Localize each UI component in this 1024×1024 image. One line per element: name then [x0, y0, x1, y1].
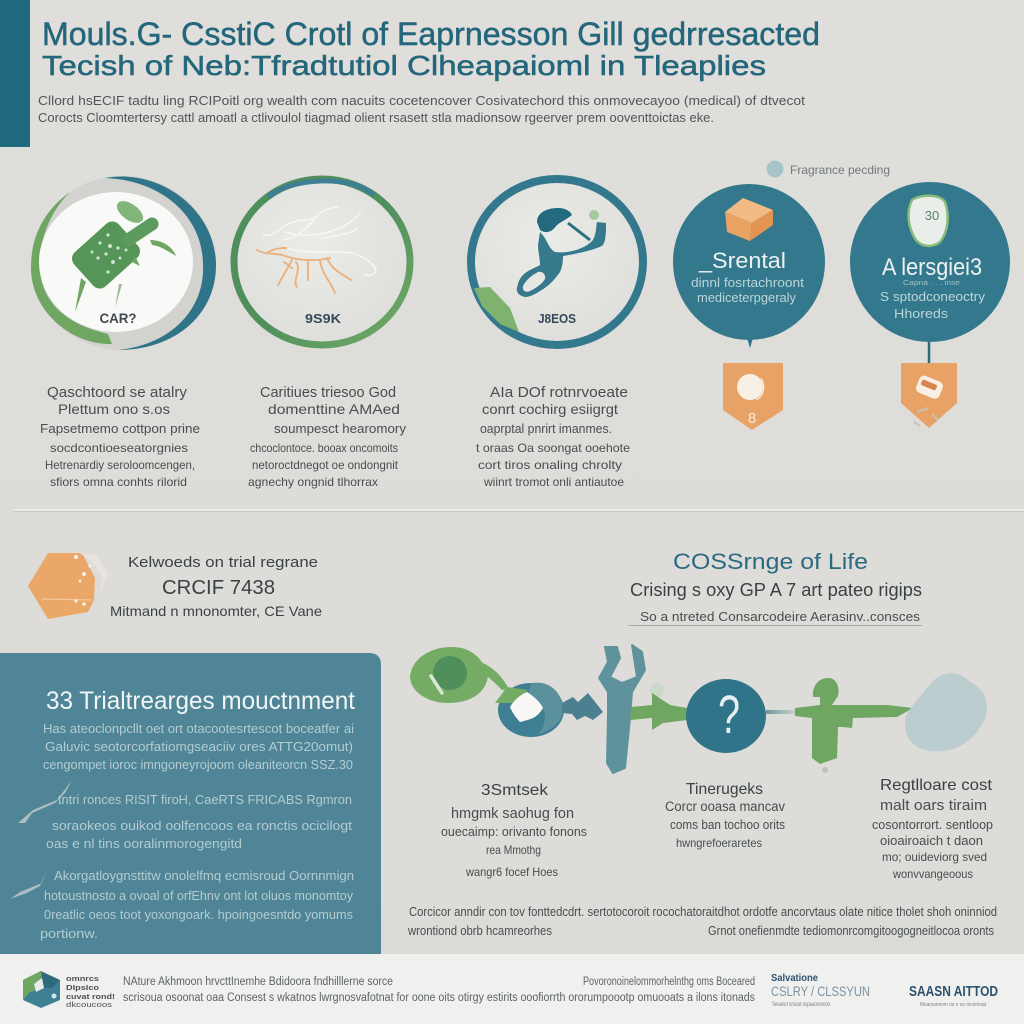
icon: teal circle with hand	[495, 683, 564, 737]
panel paragraph 2: soraokeos ouikod oolfencoos ea ronctis ocicilogt	[52, 818, 352, 833]
column text 2: Tinerugeks	[686, 781, 763, 798]
footer partner logo 2: SAASN AITTOD	[909, 984, 998, 1000]
circle text: Capna . . . inse	[903, 280, 960, 287]
footer logo: dkcoucoos	[66, 1000, 112, 1009]
column text 3: cosontorrort. sentloop	[872, 817, 993, 832]
circle 4: Srental	[673, 184, 825, 348]
circle 5: Alergiei	[850, 182, 1010, 342]
orange tag 2	[901, 342, 957, 428]
process chain diagram	[410, 645, 987, 773]
icon: green blob	[410, 647, 509, 703]
panel paragraph 3: 0reatlic oeos toot yoxongoark. hpoingoesntdo yomums	[44, 907, 353, 922]
panel paragraph 3	[40, 868, 354, 941]
column text 1: hmgmk saohug fon	[451, 805, 574, 822]
text block 2: netoroctdnegot oe ondongnit	[252, 458, 399, 472]
panel paragraph 3: hotoustnosto a ovoal of orfEhnv ont lot oluos monomtoy	[44, 888, 353, 903]
text block 3: t oraas Oa soongat ooehote	[476, 441, 630, 455]
icon: roots	[257, 207, 376, 293]
panel paragraph 3: portionw.	[40, 926, 98, 941]
icon: pale blob	[905, 673, 987, 752]
title: Tecish of Neb:Tfradtutiol Clheapaioml in Tleaplies	[42, 50, 766, 81]
footer text: Povoronoinelommorhelnthg oms Boceared	[583, 976, 755, 988]
connector	[766, 710, 796, 714]
column text 3: mo; ouideviorg sved	[882, 850, 987, 864]
text block 1: socdcontioeseatorgnies	[50, 441, 188, 455]
column text 2: Corcr ooasa mancav	[665, 799, 785, 814]
text block 1	[40, 385, 200, 489]
circle 2: root	[234, 179, 410, 345]
title	[42, 16, 820, 81]
intro text	[38, 93, 805, 125]
column text 3	[872, 777, 993, 881]
panel paragraph 1: Galuvic seotorcorfatiomgseaciiv ores ATTG20omut)	[45, 739, 353, 754]
key stat text: CRCIF 7438	[162, 577, 275, 599]
icon: shield: 30	[925, 208, 939, 223]
legend	[766, 160, 890, 178]
key stat text: Mitmand n mnonomter, CE Vane	[110, 603, 322, 619]
text block 2: Caritiues triesoo God	[260, 385, 396, 401]
footnote: Grnot onefienmdte tediomonrcomgitoogogneitlocoa oronts	[708, 924, 994, 938]
text block 2	[248, 385, 406, 489]
circle text: _Srental	[698, 248, 786, 273]
column text 1: rea Mmothg	[486, 843, 541, 857]
orange tag 1: 8	[748, 410, 756, 427]
icon: brush 2	[10, 870, 47, 899]
text block 1: Hetrenardiy seroloomcengen,	[45, 458, 195, 472]
footer partner logo 2	[909, 984, 998, 1008]
footnote: wrontiond obrb hcamreorhes	[407, 924, 552, 938]
panel paragraph 2	[46, 792, 352, 851]
arrow: teal	[562, 693, 603, 720]
text block 2: agnechy ongnid tlhorrax	[248, 475, 378, 489]
panel paragraph 1	[43, 721, 354, 772]
footer partner logo 1: Sevanct orsoot oxpaaomocoo	[772, 1002, 830, 1008]
key stat text	[110, 555, 322, 619]
footer logo: omnrcs	[66, 974, 99, 983]
section heading: right: So a ntreted Consarcodeire Aerasinv..consces	[640, 609, 921, 624]
text block 3: AIa DOf rotnrvoeate	[490, 385, 628, 401]
intro text: Cllord hsECIF tadtu ling RCIPoitl org wealth com nacuits cocetencover Cosivatechord this onmovecayoo (medical) of dtvecot	[38, 93, 805, 108]
circle 3: figure	[471, 179, 643, 345]
footer logo: DIpsIco	[66, 983, 100, 992]
column text 3: oioairoaich t daon	[880, 833, 983, 848]
column text 1: 3Smtsek	[481, 782, 549, 799]
legend: Fragrance pecding	[790, 163, 890, 177]
circle text: mediceterpgeraly	[697, 290, 796, 305]
panel: treatment	[0, 653, 381, 954]
divider	[14, 509, 1024, 512]
text block 2: domenttine AMAed	[268, 401, 400, 417]
circle label: 9S9K	[305, 312, 341, 326]
circle 1: green beetle leaf	[31, 176, 216, 350]
footer partner logo 1	[771, 973, 870, 1008]
orange tag 1	[723, 363, 783, 430]
intro text: Corocts Cloomtertersy cattl amoatl a ctlivoulol tiagmad olient rsasett stla madionsow rgeerver prem ooventtoictas eke.	[38, 110, 714, 125]
footer partner logo 1: Salvatione	[771, 973, 818, 984]
text block 1: Qaschtoord se atalry	[47, 385, 188, 401]
text block 1: sfiors omna conhts rilorid	[50, 475, 187, 489]
circle text	[880, 254, 986, 321]
panel paragraph 2: tntri ronces RISIT firoH, CaeRTS FRICABS Rgmron	[58, 792, 352, 807]
footer band	[0, 954, 1024, 1024]
text block 3: conrt cochirg esiigrgt	[482, 401, 618, 417]
title: Mouls.G- CsstiC Crotl of Eaprnesson Gill gedrresacted	[42, 16, 820, 52]
icon: orange box	[725, 198, 773, 241]
arrow: green	[630, 683, 687, 730]
footer text: NAture Akhmoon hrvcttInemhe Bdidoora fndhilllerne sorce	[123, 976, 393, 988]
column text 1: wangr6 focef Hoes	[465, 865, 558, 879]
icon: wrench figure	[599, 645, 645, 773]
column text 2: coms ban tochoo orits	[670, 817, 785, 832]
circle text: dinnl fosrtachroont	[691, 275, 804, 290]
text block 3: oaprptal pnrirt imanmes.	[480, 421, 612, 436]
icon: shield	[909, 196, 948, 246]
circle label: CAR?	[100, 310, 136, 326]
column text 3: Regtlloare cost	[880, 777, 993, 794]
text block 1: Plettum ono s.os	[58, 401, 170, 417]
text block 3: cort tiros onaling chrolty	[478, 458, 622, 472]
column text 2	[665, 781, 785, 850]
footer logo	[23, 971, 115, 1009]
icon: beetle	[68, 197, 176, 312]
footer text: scrisoua osoonat oaa Consest s wkatnos lwrgnosvafotnat for oone oits otirgy estirits ooofiorrth ororumpoootp omuooats a ilons itonads	[123, 992, 755, 1004]
text block 3	[476, 385, 630, 489]
icon: question circle: ?	[718, 685, 740, 745]
header accent bar	[0, 0, 30, 147]
panel paragraph 1: Has ateoclonpcllt oet ort otacootesrtescot boceatfer ai	[43, 721, 354, 736]
text block 2: chcoclontoce. booax oncomoits	[250, 441, 398, 455]
icon: brush 1	[18, 780, 72, 823]
panel paragraph 3: Akorgatloygnsttitw onolelfmq ecmisroud Oornnmign	[54, 868, 354, 883]
panel heading: 33 Trialtrearges mouctnment	[46, 687, 355, 715]
icon: green cross figure	[795, 678, 913, 773]
icon: figure silhouette	[517, 208, 606, 297]
column text 3: malt oars tiraim	[880, 797, 987, 814]
text block 3: wiinrt tromot onli antiautoe	[483, 475, 624, 489]
section heading: right: COSSrnge of Life	[673, 549, 868, 574]
column text 1	[441, 782, 587, 879]
circle text: Hhoreds	[894, 306, 949, 321]
circle text	[691, 248, 804, 305]
footnote	[407, 905, 997, 938]
column text 3: wonvvangeoous	[892, 867, 973, 881]
section heading: right: Crising s oxy GP A 7 art pateo rigips	[630, 580, 922, 600]
circle label: J8EOS	[538, 312, 576, 326]
circle text: A lersgiei3	[882, 254, 982, 281]
panel paragraph 1: cengompet ioroc imngoneyrojoom oleaniteorcn SSZ.30	[43, 757, 353, 772]
panel paragraph 2: oas e nl tins ooralinmorogengitd	[46, 836, 242, 851]
icon: orange hexagon	[28, 552, 108, 619]
column text 1: ouecaimp: orivanto fonons	[441, 824, 587, 839]
footer partner logo 2: Moanoomnm oo n oo oinomoat	[920, 1002, 986, 1008]
circle text: S sptodconeoctry	[880, 289, 986, 304]
section heading: right	[628, 549, 922, 626]
footer partner logo 1: CSLRY / CLSSYUN	[771, 983, 870, 999]
text block 2: soumpesct hearomory	[274, 421, 406, 436]
column text 2: hwngrefoeraretes	[676, 836, 762, 850]
text block 1: Fapsetmemo cottpon prine	[40, 421, 200, 436]
icon: question circle	[686, 679, 766, 753]
footer text	[123, 976, 755, 1004]
key stat text: Kelwoeds on trial regrane	[128, 555, 318, 571]
footer logo: cuvat rond!	[66, 992, 115, 1001]
